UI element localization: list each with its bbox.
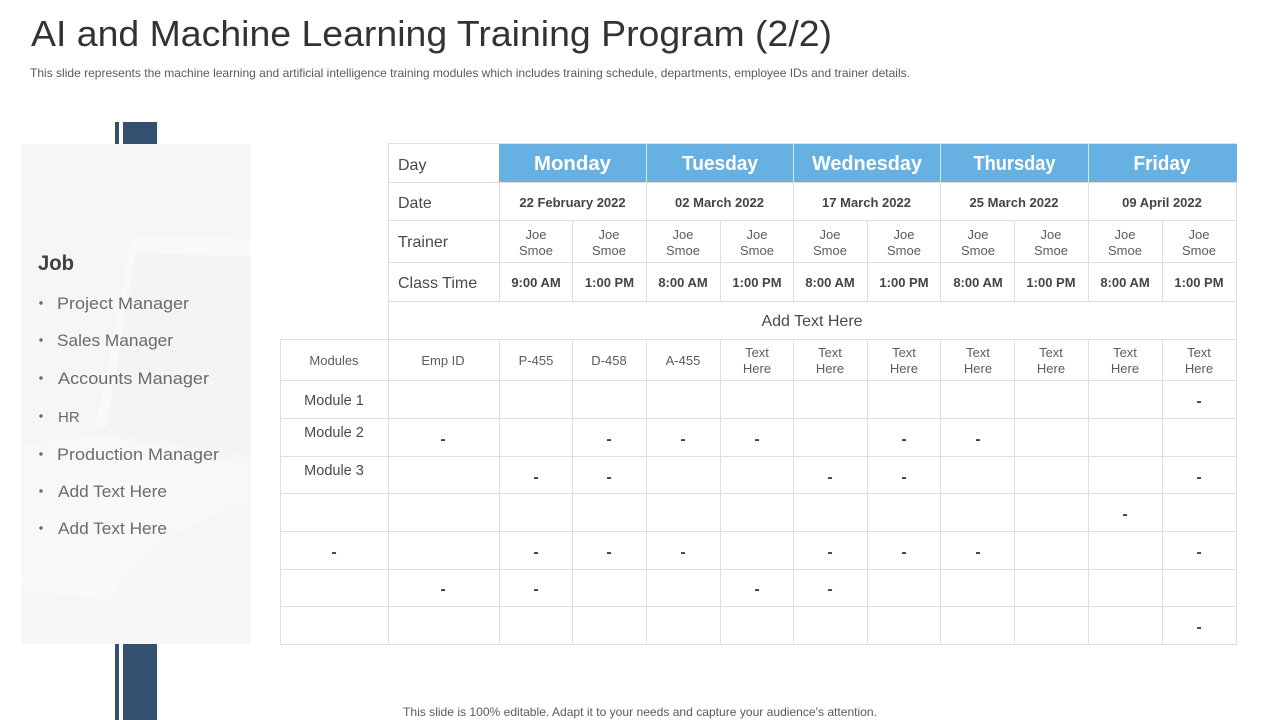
attendance dashes: - (533, 581, 539, 598)
trainers: Joe (1041, 227, 1061, 242)
trainers: Joe (673, 227, 693, 242)
trainers: Joe (599, 227, 619, 242)
module header row: P-455 (519, 353, 553, 368)
attendance dashes: - (533, 544, 539, 561)
table grid lines (280, 144, 1237, 644)
panel: job list (21, 144, 251, 644)
module labels (304, 393, 364, 479)
attendance dashes: - (1122, 506, 1128, 523)
module header row: Here (964, 361, 992, 376)
attendance dashes (331, 393, 1202, 636)
trainers: Joe (968, 227, 988, 242)
module header row: Text (966, 345, 990, 360)
dates: 22 February 2022 (519, 195, 626, 210)
attendance dashes: - (440, 431, 446, 448)
class times: 1:00 PM (585, 275, 634, 290)
day headings: Thursday (974, 153, 1056, 175)
footer note: This slide is 100% editable. Adapt it to your needs and capture your audience's attention. (403, 705, 877, 719)
job bullet list: Project Manager (57, 294, 189, 313)
module header row: Text (1039, 345, 1063, 360)
trainers (519, 227, 1216, 258)
class times: 1:00 PM (1174, 275, 1224, 290)
module header row: Text (1187, 345, 1211, 360)
add text row: Add Text Here (761, 313, 863, 330)
dates: 09 April 2022 (1122, 195, 1202, 210)
job bullet list: Production Manager (57, 445, 219, 464)
module labels: Module 3 (304, 463, 364, 479)
trainers: Smoe (1182, 243, 1216, 258)
day header fill (499, 144, 1237, 182)
row labels: Date (398, 195, 432, 212)
module header row (309, 345, 1213, 376)
trainers: Smoe (740, 243, 774, 258)
dates: 25 March 2022 (970, 195, 1058, 210)
class times: 8:00 AM (805, 275, 855, 290)
dates (519, 195, 1202, 210)
module header row: Emp ID (421, 353, 465, 368)
job bullet list: Add Text Here (58, 482, 167, 501)
row labels: Day (398, 157, 426, 174)
day headings (534, 153, 1191, 175)
module labels: Module 1 (304, 393, 364, 409)
class times: 8:00 AM (953, 275, 1003, 290)
trainers: Smoe (887, 243, 921, 258)
class times: 8:00 AM (658, 275, 708, 290)
trainers: Joe (1115, 227, 1135, 242)
job bullet list: HR (58, 409, 80, 426)
attendance dashes: - (827, 544, 833, 561)
class times: 1:00 PM (879, 275, 929, 290)
dates: 17 March 2022 (822, 195, 911, 210)
module header row: Here (890, 361, 918, 376)
day headings: Tuesday (682, 153, 759, 175)
attendance dashes: - (827, 581, 833, 598)
module header row: Text (892, 345, 916, 360)
attendance dashes: - (606, 469, 612, 486)
day header separators (646, 144, 1088, 182)
trainers: Joe (526, 227, 546, 242)
attendance dashes: - (680, 431, 686, 448)
trainers: Smoe (961, 243, 995, 258)
module header row: Text (1113, 345, 1137, 360)
trainers: Smoe (519, 243, 553, 258)
subtitle: This slide represents the machine learning and artificial intelligence training modules which includes training schedule, departments, employee IDs and trainer details. (30, 66, 910, 80)
row labels: Trainer (398, 234, 449, 251)
trainers: Smoe (1034, 243, 1068, 258)
panel background with faint laptop (21, 144, 251, 644)
class times: 8:00 AM (1100, 275, 1150, 290)
class times: 1:00 PM (732, 275, 782, 290)
row labels: Class Time (398, 275, 477, 292)
attendance dashes: - (975, 544, 981, 561)
attendance dashes: - (680, 544, 686, 561)
job bullet list: Accounts Manager (58, 369, 209, 388)
attendance dashes: - (440, 581, 446, 598)
attendance dashes: - (901, 469, 907, 486)
class times: 9:00 AM (511, 275, 561, 290)
trainers: Smoe (666, 243, 700, 258)
attendance dashes: - (754, 581, 760, 598)
decorative vertical bars (115, 122, 157, 720)
job bullet list: Sales Manager (57, 331, 173, 350)
attendance dashes: - (1196, 619, 1202, 636)
module header row: Here (1111, 361, 1139, 376)
attendance dashes: - (901, 431, 907, 448)
row labels (398, 157, 477, 292)
day headings: Monday (534, 153, 612, 175)
attendance dashes: - (606, 544, 612, 561)
module header row: Text (745, 345, 769, 360)
module header row: A-455 (666, 353, 700, 368)
attendance dashes: - (975, 431, 981, 448)
module header row: Modules (309, 353, 359, 368)
trainers: Smoe (813, 243, 847, 258)
module header row: Here (816, 361, 844, 376)
job bullet list: Add Text Here (58, 519, 167, 538)
module header row: Here (1037, 361, 1065, 376)
day headings: Wednesday (812, 153, 923, 175)
attendance dashes: - (1196, 544, 1202, 561)
trainers: Joe (894, 227, 914, 242)
attendance dashes: - (827, 469, 833, 486)
module header row: D-458 (591, 353, 627, 368)
attendance dashes: - (1196, 469, 1202, 486)
module header row: Here (1185, 361, 1213, 376)
dates: 02 March 2022 (675, 195, 764, 210)
class times: 1:00 PM (1026, 275, 1076, 290)
job bullet list (39, 294, 219, 538)
trainers: Joe (747, 227, 767, 242)
schedule table (280, 144, 1237, 644)
module header row: Here (743, 361, 771, 376)
class times (511, 275, 1224, 290)
title: AI and Machine Learning Training Program (2/2) (31, 13, 832, 54)
trainers: Smoe (592, 243, 626, 258)
attendance dashes: - (533, 469, 539, 486)
attendance dashes: - (331, 544, 337, 561)
attendance dashes: - (1196, 393, 1202, 410)
day headings: Friday (1134, 153, 1191, 175)
attendance dashes: - (901, 544, 907, 561)
module labels: Module 2 (304, 425, 364, 441)
module header row: Text (818, 345, 842, 360)
attendance dashes: - (606, 431, 612, 448)
trainers: Smoe (1108, 243, 1142, 258)
heading: Job: Job (38, 252, 74, 275)
trainers: Joe (1189, 227, 1209, 242)
trainers: Joe (820, 227, 840, 242)
attendance dashes: - (754, 431, 760, 448)
